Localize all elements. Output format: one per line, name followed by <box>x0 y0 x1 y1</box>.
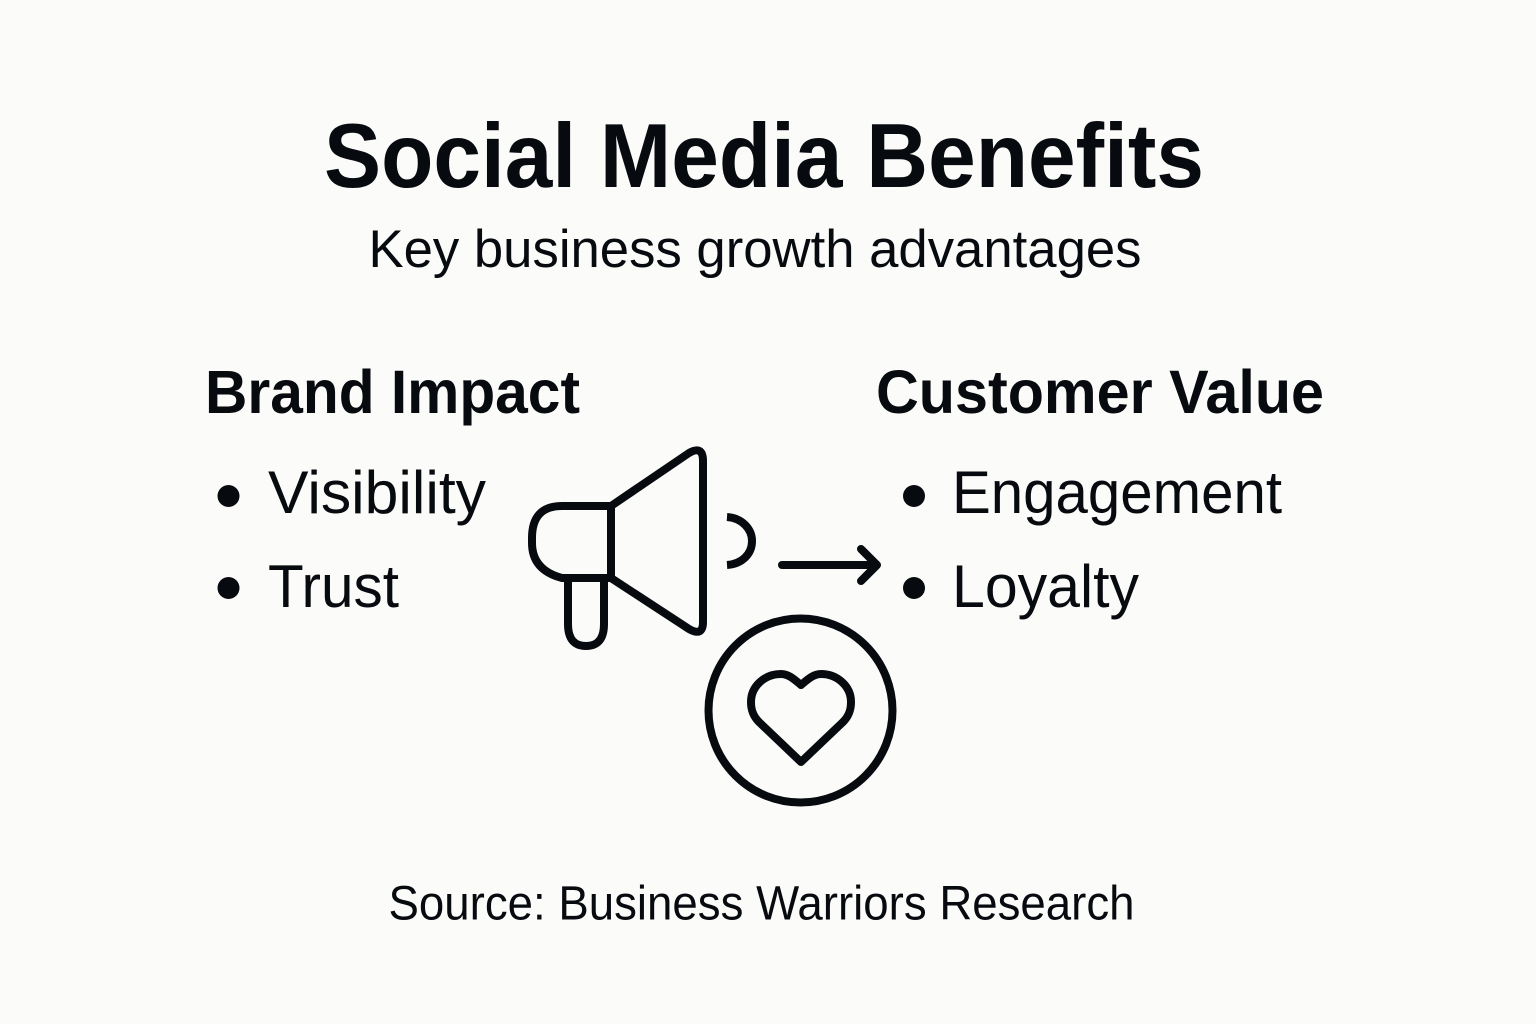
title: Social Media Benefits <box>324 106 1204 207</box>
icon: megaphone <box>532 450 752 646</box>
heading: customer value: Customer Value <box>876 358 1324 426</box>
panel: customer value <box>876 358 1324 620</box>
source note: Source: Business Warriors Research <box>388 878 1134 930</box>
bullet: engagement: Engagement <box>952 459 1282 526</box>
bullet: loyalty: Loyalty <box>952 553 1139 620</box>
bullet: trust: Trust <box>268 553 399 620</box>
heading: brand impact: Brand Impact <box>205 358 580 426</box>
panel: brand impact <box>205 358 580 620</box>
bullet: visibility: Visibility <box>268 459 486 526</box>
icon: heart in circle <box>708 618 892 802</box>
subtitle: Key business growth advantages <box>368 220 1142 279</box>
arrow <box>782 549 877 581</box>
